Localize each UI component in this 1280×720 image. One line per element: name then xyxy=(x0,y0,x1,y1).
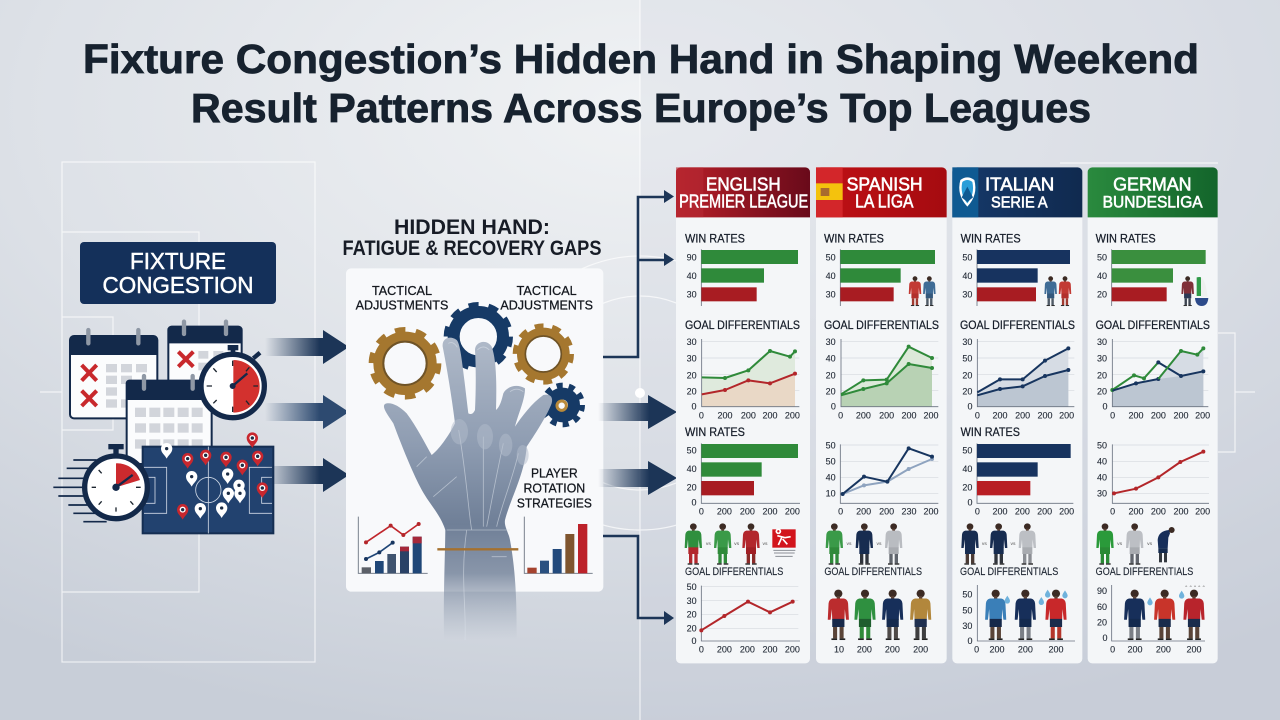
line chart: goal differentials: 0 xyxy=(1102,401,1107,411)
player group: goal differentials with sweat drops xyxy=(960,566,1075,654)
panel bottom: line chart, players and goal differentials xyxy=(1096,440,1210,654)
player group: goal differentials xyxy=(824,566,931,654)
line chart: goal differentials: GOAL DIFFERENTIALS xyxy=(960,318,1075,332)
player group: goal differentials with sweat drops: ° ° ° ° ° xyxy=(1185,585,1205,590)
line chart: goal differentials: GOAL DIFFERENTIALS xyxy=(1096,318,1210,332)
panel: hidden hand xyxy=(346,268,603,640)
bar chart: win rates: 50 xyxy=(962,252,972,262)
header: BUNDESLIGA xyxy=(1103,193,1203,212)
icon: second calendar xyxy=(168,322,242,393)
bar chart: win rates second: 200 xyxy=(740,506,755,516)
line chart: goal differentials xyxy=(1096,318,1210,420)
line chart: goal differentials: 20 xyxy=(1097,370,1107,380)
bar chart: win rates xyxy=(824,231,936,306)
players comparison: vs xyxy=(877,541,882,547)
header: GERMAN xyxy=(1113,174,1191,195)
icon: large gold gear xyxy=(373,331,437,396)
line chart: goal differentials: 30 xyxy=(687,354,697,364)
player group: goal differentials with sweat drops: 30 xyxy=(962,621,972,631)
line chart: goal differentials: 0 xyxy=(831,401,836,411)
line chart: goal differentials: 50 xyxy=(962,354,972,364)
bar chart: win rates: 40 xyxy=(1097,271,1107,281)
line chart: goal differentials: 200 xyxy=(785,410,800,420)
line chart: unlabeled: 200 xyxy=(1151,506,1166,516)
bar chart: win rates second: 50 xyxy=(687,446,697,456)
arrow: to league panels upper xyxy=(598,395,677,429)
player group: goal differentials: GOAL DIFFERENTIALS xyxy=(824,566,922,578)
line chart: unlabeled: 40 xyxy=(1097,456,1107,466)
line chart: unlabeled: 200 xyxy=(1128,506,1143,516)
icons: calendars, stopwatches and pitch xyxy=(53,322,273,533)
panel top: header, win rates and goal differentials xyxy=(952,167,1082,663)
players comparison: vs xyxy=(982,541,987,547)
title: Fixture Congestion’s Hidden Hand in Shaping Weekend xyxy=(83,36,1199,82)
chart: mini bars right xyxy=(524,517,593,573)
illustration: translucent hand xyxy=(384,338,552,640)
bar chart: win rates xyxy=(961,231,1071,306)
line chart: goal differentials: 40 xyxy=(826,354,836,364)
line chart: goal differentials: 20 xyxy=(962,370,972,380)
line chart: goal differentials: 0 xyxy=(1110,410,1115,420)
bar chart: win rates: WIN RATES xyxy=(685,231,745,245)
panel bottom: win rates, players and goal differentials xyxy=(685,425,800,654)
bar chart: win rates second: 0 xyxy=(699,506,704,516)
line chart: goal differentials: 30 xyxy=(1097,354,1107,364)
line chart: goal differentials: GOAL DIFFERENTIALS xyxy=(685,318,800,332)
bar chart: win rates second: WIN RATES xyxy=(961,425,1020,439)
player group: goal differentials with sweat drops: 20 xyxy=(1097,618,1107,628)
heading: hidden hand: HIDDEN HAND: xyxy=(394,216,550,239)
panel bottom: line chart, players and goal differentials xyxy=(824,440,938,654)
label: tactical adjustments right: ADJUSTMENTS xyxy=(500,297,593,312)
line chart: goal differentials second: GOAL DIFFERENTIALS xyxy=(685,566,783,578)
bar chart: win rates second: 200 xyxy=(717,506,732,516)
line chart: unlabeled: 40 xyxy=(826,473,836,483)
players comparison: vs xyxy=(1117,541,1123,547)
bar chart: win rates: WIN RATES xyxy=(824,231,884,245)
player group: goal differentials with sweat drops: 50 xyxy=(962,605,972,615)
label: tactical adjustments left: TACTICAL xyxy=(372,283,432,298)
line chart: unlabeled: 200 xyxy=(923,506,938,516)
line chart: goal differentials: 200 xyxy=(1195,410,1210,420)
header xyxy=(1088,167,1218,217)
line chart: goal differentials: 20 xyxy=(962,386,972,396)
line chart: goal differentials: 200 xyxy=(717,410,732,420)
bar chart: win rates: 40 xyxy=(826,271,836,281)
header with Spanish flag: SPANISH xyxy=(847,174,923,195)
bar chart: win rates: 50 xyxy=(1097,252,1107,262)
line chart: goal differentials: 200 xyxy=(879,410,894,420)
line chart: goal differentials: 0 xyxy=(699,410,704,420)
bar chart: win rates second: 0 xyxy=(975,506,980,516)
icon: small gold gear xyxy=(516,327,571,381)
player bent over xyxy=(1158,527,1175,562)
heading: fixture congestion: FIXTURE xyxy=(130,248,226,274)
bar chart: win rates: 90 xyxy=(687,252,697,262)
arrow: branch to lower charts xyxy=(603,536,674,625)
line chart: unlabeled: 200 xyxy=(856,506,871,516)
line chart: goal differentials second: 200 xyxy=(762,644,777,654)
line chart: goal differentials second: 200 xyxy=(717,644,732,654)
bar chart: win rates second: 200 xyxy=(785,506,800,516)
line chart: goal differentials: 30 xyxy=(826,337,836,347)
player group: goal differentials with sweat drops: GOAL DIFFERENTIALS xyxy=(1096,566,1193,578)
bar chart: win rates: 40 xyxy=(687,271,697,281)
icon: tactical pitch with pins xyxy=(143,432,273,533)
icon: navy gear xyxy=(448,306,509,367)
bar chart: win rates: 50 xyxy=(826,252,836,262)
bar chart: win rates second xyxy=(685,425,800,516)
label: player rotation strategies: STRATEGIES xyxy=(517,496,592,511)
bar chart: win rates second: 20 xyxy=(962,482,972,492)
panel: Italian Serie A xyxy=(952,167,1082,663)
bar chart: win rates: 20 xyxy=(1097,290,1107,300)
bar chart: win rates second: 50 xyxy=(962,446,972,456)
bar chart: win rates: WIN RATES xyxy=(961,231,1021,245)
line chart: unlabeled: 50 xyxy=(1097,440,1107,450)
line chart: unlabeled: 0 xyxy=(1110,506,1115,516)
line chart: goal differentials: 200 xyxy=(901,410,916,420)
line chart: goal differentials: 20 xyxy=(826,370,836,380)
header with Spanish flag xyxy=(816,167,947,217)
player group: goal differentials: 200 xyxy=(885,644,900,654)
line chart: goal differentials second: 0 xyxy=(691,636,696,646)
player group: goal differentials with sweat drops: 200 xyxy=(989,644,1004,654)
line chart: goal differentials: 200 xyxy=(856,410,871,420)
line chart: unlabeled: 200 xyxy=(879,506,894,516)
player group: goal differentials: 10 xyxy=(834,644,844,654)
heading: hidden hand xyxy=(342,216,602,260)
bar chart: win rates: 30 xyxy=(826,290,836,300)
player group: goal differentials with sweat drops: 200 xyxy=(1156,644,1171,654)
panel top: header, win rates and goal differentials xyxy=(816,167,947,663)
icon: stopwatch with red half xyxy=(201,345,264,418)
label: tactical adjustments left xyxy=(356,283,449,312)
bar chart: win rates: 30 xyxy=(962,290,972,300)
line chart: goal differentials: 200 xyxy=(1059,410,1074,420)
bar chart: win rates: 30 xyxy=(687,290,697,300)
player group: goal differentials with sweat drops: 0 xyxy=(1102,633,1107,643)
heading: hidden hand: FATIGUE & RECOVERY GAPS xyxy=(342,237,602,260)
line chart: goal differentials second: 20 xyxy=(687,624,697,634)
player group: goal differentials with sweat drops: 0 xyxy=(1110,644,1115,654)
line chart: goal differentials: 0 xyxy=(967,401,972,411)
line chart: unlabeled: 200 xyxy=(1173,506,1188,516)
line chart: goal differentials: 20 xyxy=(1097,386,1107,396)
players comparison: vs xyxy=(847,541,852,547)
label: tactical adjustments right xyxy=(500,283,593,312)
player group: goal differentials with sweat drops: 200 xyxy=(1018,644,1033,654)
bar chart: win rates second: 200 xyxy=(1037,506,1052,516)
player group: goal differentials with sweat drops: 50 xyxy=(962,589,972,599)
line chart: goal differentials: 0 xyxy=(838,410,843,420)
icon: calendar with crosses xyxy=(70,330,157,418)
label: player rotation strategies: ROTATION xyxy=(523,481,585,496)
icon: large calendar xyxy=(127,376,212,464)
panel top: header, win rates and goal differentials xyxy=(1088,167,1218,663)
header xyxy=(676,167,810,217)
bar chart: win rates second: 200 xyxy=(1059,506,1074,516)
line chart: unlabeled xyxy=(826,440,938,516)
line chart: unlabeled: 0 xyxy=(838,506,843,516)
arrow: congestion to hidden hand (bottom) xyxy=(265,458,349,492)
icon: Bundesliga logo xyxy=(772,529,796,556)
player group: goal differentials with sweat drops: 90 xyxy=(1097,586,1107,596)
panel: fixture congestion xyxy=(53,242,349,533)
panel: English Premier League xyxy=(676,167,810,663)
line chart: goal differentials xyxy=(685,318,800,420)
player group: goal differentials with sweat drops: 0 xyxy=(967,636,972,646)
arrow: branch to premier league xyxy=(603,190,674,357)
line chart: unlabeled xyxy=(1097,440,1210,516)
chart: mini bars and lines left xyxy=(358,517,428,573)
line chart: goal differentials: 200 xyxy=(741,410,756,420)
line chart: goal differentials: 20 xyxy=(687,370,697,380)
player group: goal differentials with sweat drops xyxy=(1096,566,1205,654)
player group: goal differentials: 200 xyxy=(913,644,928,654)
label: tactical adjustments left: ADJUSTMENTS xyxy=(356,297,449,312)
bar chart: win rates second: 0 xyxy=(967,498,972,508)
players comparison xyxy=(826,523,902,565)
line chart: goal differentials xyxy=(960,318,1075,420)
line chart: goal differentials second: 20 xyxy=(687,610,697,620)
line chart: goal differentials: 200 xyxy=(1151,410,1166,420)
label: player rotation strategies: PLAYER xyxy=(531,466,578,481)
line chart: goal differentials: 20 xyxy=(687,386,697,396)
title xyxy=(83,36,1199,131)
line chart: goal differentials: 200 xyxy=(1037,410,1052,420)
line chart: unlabeled: 40 xyxy=(1097,473,1107,483)
bar chart: win rates second: 40 xyxy=(962,464,972,474)
line chart: goal differentials: 30 xyxy=(962,337,972,347)
title: Result Patterns Across Europe’s Top Leagues xyxy=(191,85,1091,131)
line chart: goal differentials: 200 xyxy=(923,410,938,420)
line chart: goal differentials: 0 xyxy=(975,410,980,420)
line chart: goal differentials second: 200 xyxy=(740,644,755,654)
bar chart: win rates xyxy=(1096,231,1208,306)
label: player rotation strategies xyxy=(517,466,592,511)
panel: German Bundesliga xyxy=(1088,167,1218,663)
arrow: to league panels lower xyxy=(598,461,677,495)
player group: goal differentials with sweat drops: GOAL DIFFERENTIALS xyxy=(960,566,1058,578)
bar chart: win rates: 40 xyxy=(962,271,972,281)
arrow: congestion to hidden hand (top) xyxy=(265,330,349,364)
player group: goal differentials with sweat drops: 60 xyxy=(1097,602,1107,612)
line chart: goal differentials: 20 xyxy=(826,386,836,396)
line chart: goal differentials second xyxy=(685,566,800,654)
line chart: goal differentials: 200 xyxy=(1173,410,1188,420)
label: tactical adjustments right: TACTICAL xyxy=(517,283,577,298)
panel bottom: win rates, players and goal differentials xyxy=(960,425,1075,654)
line chart: goal differentials: 30 xyxy=(687,337,697,347)
line chart: goal differentials: 200 xyxy=(992,410,1007,420)
line chart: goal differentials second: 0 xyxy=(699,644,704,654)
bar chart: win rates second: 40 xyxy=(687,464,697,474)
bar chart: win rates second: 20 xyxy=(687,482,697,492)
line chart: goal differentials: GOAL DIFFERENTIALS xyxy=(824,318,939,332)
line chart: unlabeled: 50 xyxy=(826,440,836,450)
players with Bundesliga logo: vs xyxy=(763,541,768,547)
line chart: goal differentials: 200 xyxy=(762,410,777,420)
line chart: unlabeled: 200 xyxy=(1195,506,1210,516)
players comparison: vs xyxy=(1011,541,1016,547)
line chart: unlabeled: 50 xyxy=(826,456,836,466)
player group: goal differentials with sweat drops: 200 xyxy=(1048,644,1063,654)
line chart: goal differentials second: 30 xyxy=(687,596,697,606)
players with Bundesliga logo xyxy=(685,523,796,565)
header with shield: ITALIAN xyxy=(985,174,1054,195)
bar chart: win rates second: 0 xyxy=(691,498,696,508)
header: ENGLISH xyxy=(706,174,781,195)
header with shield: SERIE A xyxy=(991,195,1048,212)
bar chart: win rates: WIN RATES xyxy=(1096,231,1156,245)
icon: speeding stopwatch xyxy=(53,444,147,522)
players comparison: vs xyxy=(1147,541,1153,547)
bar chart: win rates second: 200 xyxy=(1015,506,1030,516)
line chart: unlabeled: 230 xyxy=(901,506,916,516)
header with shield xyxy=(952,167,1082,217)
heading: fixture congestion xyxy=(80,242,276,304)
bar chart: win rates second: WIN RATES xyxy=(685,425,745,439)
player group: goal differentials with sweat drops: 200 xyxy=(1186,644,1201,654)
bar chart: win rates second: 200 xyxy=(762,506,777,516)
bar chart: win rates second: 200 xyxy=(992,506,1007,516)
header: PREMIER LEAGUE xyxy=(679,191,808,212)
line chart: goal differentials second: 50 xyxy=(687,582,697,592)
players comparison xyxy=(961,523,1036,565)
line chart: goal differentials: 0 xyxy=(691,401,696,411)
players with Bundesliga logo: vs xyxy=(734,541,740,547)
bar chart: win rates xyxy=(685,231,798,306)
line chart: goal differentials: 200 xyxy=(1128,410,1143,420)
line chart: goal differentials xyxy=(824,318,939,420)
heading: fixture congestion: CONGESTION xyxy=(102,272,254,298)
line chart: goal differentials: 30 xyxy=(1097,337,1107,347)
icon: small navy gear xyxy=(543,386,582,424)
player group: goal differentials: 200 xyxy=(857,644,872,654)
players comparison xyxy=(1096,523,1175,565)
player group: goal differentials with sweat drops: 0 xyxy=(974,644,979,654)
players with Bundesliga logo: vs xyxy=(706,541,711,547)
line chart: goal differentials: 200 xyxy=(1015,410,1030,420)
line chart: goal differentials second: 200 xyxy=(785,644,800,654)
line chart: unlabeled: 30 xyxy=(1097,489,1107,499)
header with Spanish flag: LA LIGA xyxy=(855,191,914,212)
player group: goal differentials with sweat drops: 200 xyxy=(1127,644,1142,654)
panel top: header, win rates and goal differentials xyxy=(676,167,810,663)
line chart: unlabeled: 10 xyxy=(826,489,836,499)
arrow: congestion to hidden hand (middle) xyxy=(265,395,349,429)
bar chart: win rates second xyxy=(961,425,1074,516)
panel: Spanish La Liga xyxy=(816,167,947,663)
